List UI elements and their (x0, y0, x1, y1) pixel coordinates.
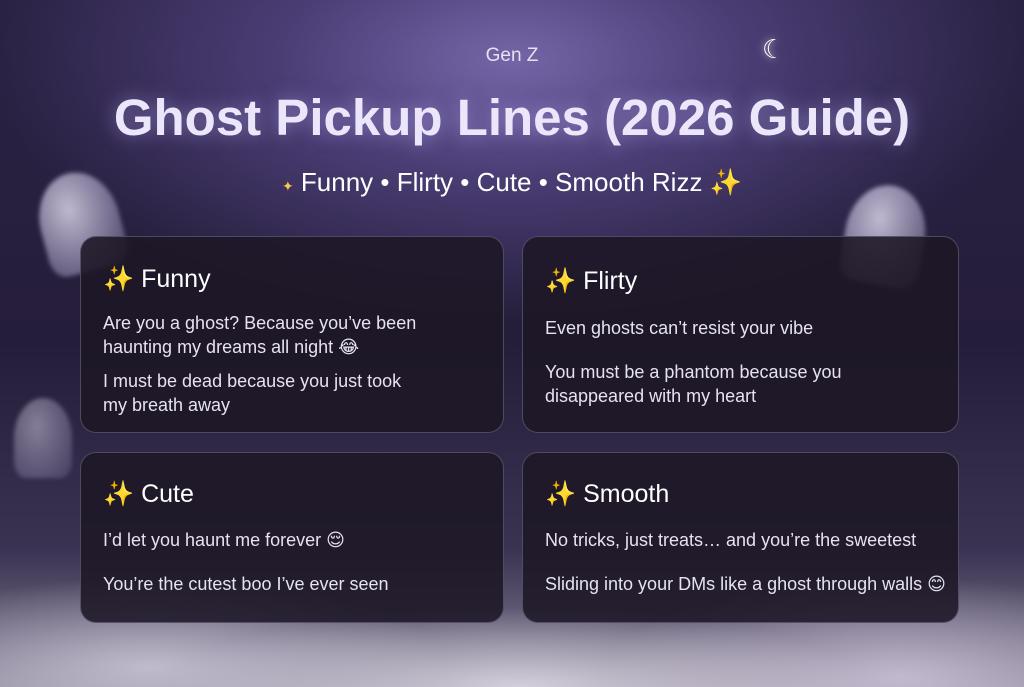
text: funny lines: Are you a ghost? Because you’ve been (103, 313, 416, 333)
panel: flirty: You must be a phantom because you (545, 362, 842, 382)
text: funny lines (103, 313, 416, 357)
heading: cute: ✨ Cute (103, 480, 194, 508)
text: smooth lines: No tricks, just treats… and you’re the sweetest (545, 530, 916, 550)
panel: smooth (522, 452, 959, 623)
panel: smooth: Sliding into your DMs like a ghost through walls 😊 (545, 574, 946, 594)
label: Gen Z: Gen Z (486, 45, 538, 66)
heading: flirty: ✨ Flirty (545, 267, 637, 295)
panel: flirty: disappeared with my heart (545, 386, 756, 406)
panel: funny (80, 236, 504, 433)
heading: smooth: ✨ Smooth (545, 480, 669, 508)
icon: ghost right (837, 179, 933, 291)
subtitle: ✦ Funny • Flirty • Cute • Smooth Rizz ✨ (282, 167, 742, 197)
panel: cute: You’re the cutest boo I’ve ever seen (103, 574, 389, 594)
panel: funny: my breath away (103, 395, 230, 415)
icon: ghost small left (14, 398, 72, 478)
title: Ghost Pickup Lines (2026 Guide) (114, 89, 910, 146)
icon: ghost left (28, 163, 132, 281)
text: flirty lines: Even ghosts can’t resist your vibe (545, 318, 813, 338)
heading: funny: ✨ Funny (103, 265, 211, 293)
panel: funny: I must be dead because you just took (103, 371, 401, 391)
text: cute lines: I’d let you haunt me forever 😌 (103, 530, 345, 550)
panel: flirty (522, 236, 959, 433)
icon: moon: ☾ (762, 34, 785, 64)
text: funny lines: haunting my dreams all night 😂 (103, 337, 359, 357)
panel: cute (80, 452, 504, 623)
